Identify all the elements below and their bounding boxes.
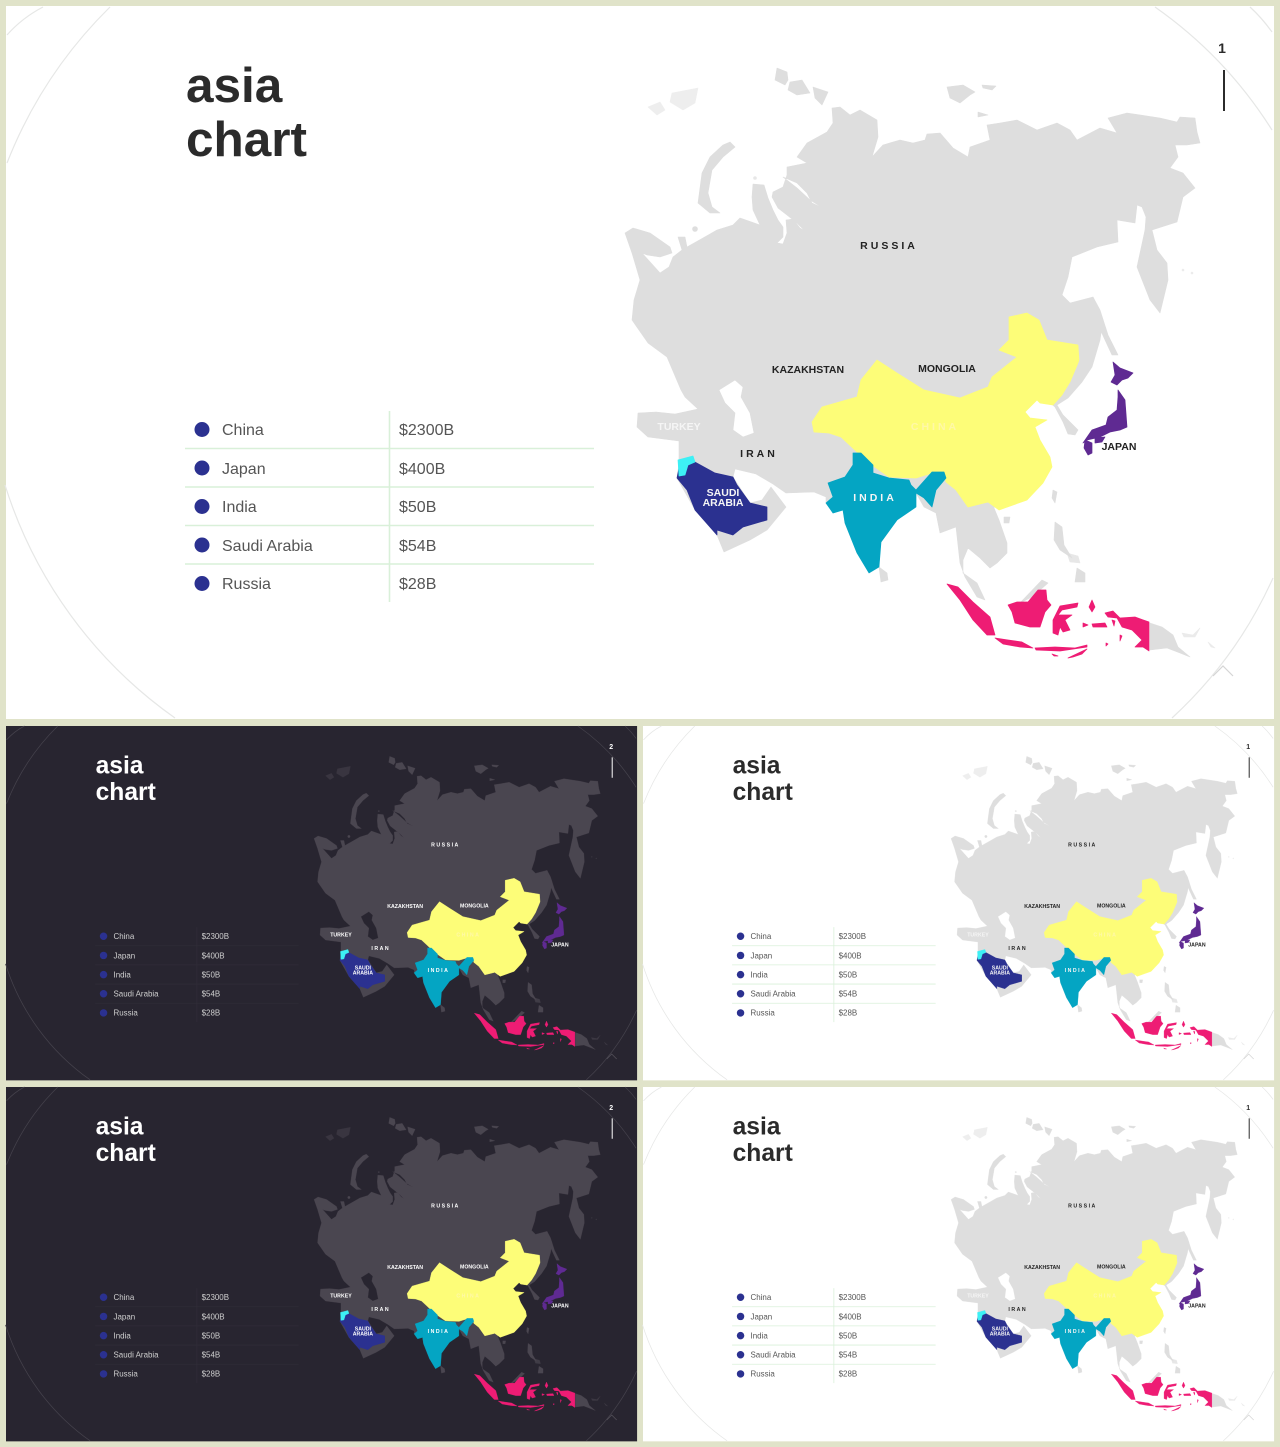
country labels: CHINA (911, 421, 959, 433)
country labels: KAZAKHSTAN (772, 364, 844, 376)
data table: $54B (839, 990, 857, 999)
data table: Saudi Arabia (751, 990, 796, 999)
country labels: SAUDI (355, 965, 372, 971)
data table: India (222, 499, 257, 516)
country labels: JAPAN (551, 1303, 569, 1309)
country labels: INDIA (428, 968, 449, 974)
country labels: ARABIA (353, 970, 373, 976)
country labels: SAUDI (992, 965, 1009, 971)
data table (95, 927, 299, 1022)
data table: China (222, 422, 264, 439)
data table: Russia (114, 1370, 138, 1379)
country labels (330, 842, 569, 976)
data table: $2300B (839, 932, 866, 941)
data table: $400B (202, 951, 225, 960)
data table: $2300B (399, 422, 454, 439)
country labels: SAUDI (707, 487, 739, 499)
data table: $54B (399, 538, 436, 555)
country labels: ARABIA (990, 1331, 1010, 1337)
country labels: IRAN (1008, 946, 1027, 952)
country labels: TURKEY (967, 933, 989, 939)
page bar (1223, 70, 1225, 111)
country labels: TURKEY (330, 1294, 352, 1300)
page number: 1 (1218, 40, 1226, 56)
data table: $400B (399, 461, 445, 478)
data table: Japan (751, 1312, 772, 1321)
country labels: CHINA (456, 1294, 480, 1300)
country labels: RUSSIA (431, 842, 460, 848)
country labels: MONGOLIA (1097, 904, 1126, 910)
country labels: SAUDI (355, 1326, 372, 1332)
data table: $50B (202, 1331, 220, 1340)
title: asia (733, 1113, 781, 1140)
scroll chevron (607, 1415, 617, 1420)
page bar (611, 1118, 614, 1139)
country labels: JAPAN (1102, 441, 1136, 453)
data table: $54B (202, 990, 220, 999)
map of asia (951, 1117, 1245, 1411)
data table: $54B (839, 1351, 857, 1360)
panel: large light slide (5, 6, 1274, 719)
country labels: SAUDI (992, 1326, 1009, 1332)
country labels: IRAN (371, 946, 390, 952)
country labels: MONGOLIA (1097, 1265, 1126, 1271)
country labels (657, 240, 1136, 509)
data table: Saudi Arabia (114, 1351, 159, 1360)
data table (95, 1288, 299, 1383)
data table: $400B (839, 1312, 862, 1321)
country labels: CHINA (456, 933, 480, 939)
country labels (967, 842, 1206, 976)
page bar (1248, 757, 1251, 778)
country labels: CHINA (1093, 1294, 1117, 1300)
data table: $50B (202, 970, 220, 979)
data table: Russia (751, 1009, 775, 1018)
data table: $28B (202, 1009, 220, 1018)
data table: $400B (202, 1312, 225, 1321)
title: chart (733, 1140, 793, 1167)
country labels: ARABIA (990, 970, 1010, 976)
data table: Russia (222, 576, 271, 593)
country labels: JAPAN (1188, 1303, 1206, 1309)
title: chart (96, 1140, 156, 1167)
data table: $28B (202, 1370, 220, 1379)
data table (732, 1288, 936, 1383)
data table: $50B (839, 970, 857, 979)
map of asia (314, 1117, 608, 1411)
country labels: CHINA (1093, 933, 1117, 939)
data table (185, 411, 594, 602)
data table: Russia (751, 1370, 775, 1379)
country labels: RUSSIA (860, 240, 918, 252)
country labels: MONGOLIA (918, 363, 976, 375)
data table: Saudi Arabia (751, 1351, 796, 1360)
country labels: IRAN (371, 1307, 390, 1313)
map of asia (625, 68, 1215, 658)
scroll chevron (1244, 1415, 1254, 1420)
data table: $28B (839, 1370, 857, 1379)
data table: $50B (399, 499, 436, 516)
title: asia (186, 58, 282, 113)
title: chart (96, 779, 156, 806)
data table: China (751, 1293, 772, 1302)
country labels: KAZAKHSTAN (1024, 904, 1060, 910)
data table: China (114, 932, 135, 941)
country labels: INDIA (853, 492, 897, 504)
data table: Russia (114, 1009, 138, 1018)
country labels: MONGOLIA (460, 1265, 489, 1271)
country labels: JAPAN (1188, 942, 1206, 948)
country labels (967, 1203, 1206, 1337)
country labels: TURKEY (330, 933, 352, 939)
title: chart (186, 112, 307, 167)
data table: India (114, 1331, 131, 1340)
country labels: ARABIA (703, 497, 744, 509)
data table: $28B (839, 1009, 857, 1018)
map of asia (951, 756, 1245, 1050)
data table: $2300B (839, 1293, 866, 1302)
page number: 1 (1246, 744, 1250, 751)
panel: light slide top (643, 726, 1274, 1080)
country labels: TURKEY (657, 421, 701, 433)
map of asia (314, 756, 608, 1050)
data table (732, 927, 936, 1022)
data table: Japan (751, 951, 772, 960)
country labels: KAZAKHSTAN (387, 904, 423, 910)
data table: Japan (222, 461, 266, 478)
country labels: MONGOLIA (460, 904, 489, 910)
country labels: INDIA (428, 1329, 449, 1335)
panel: dark slide bottom (6, 1087, 637, 1441)
country labels: INDIA (1065, 968, 1086, 974)
country labels: JAPAN (551, 942, 569, 948)
page bar (1248, 1118, 1251, 1139)
data table: $400B (839, 951, 862, 960)
title: asia (733, 752, 781, 779)
data table: India (114, 970, 131, 979)
country labels: KAZAKHSTAN (1024, 1265, 1060, 1271)
country labels: RUSSIA (1068, 1203, 1097, 1209)
data table: Japan (114, 1312, 135, 1321)
data table: Japan (114, 951, 135, 960)
data table: China (751, 932, 772, 941)
page number: 1 (1246, 1105, 1250, 1112)
country labels: KAZAKHSTAN (387, 1265, 423, 1271)
page number: 2 (609, 744, 613, 751)
data table: $50B (839, 1331, 857, 1340)
data table: India (751, 970, 768, 979)
data table: Saudi Arabia (114, 990, 159, 999)
data table: Saudi Arabia (222, 538, 313, 555)
country labels (330, 1203, 569, 1337)
country labels: INDIA (1065, 1329, 1086, 1335)
scroll chevron (1244, 1054, 1254, 1059)
data table: India (751, 1331, 768, 1340)
country labels: TURKEY (967, 1294, 989, 1300)
data table: China (114, 1293, 135, 1302)
page number: 2 (609, 1105, 613, 1112)
page bar (611, 757, 614, 778)
scroll chevron (607, 1054, 617, 1059)
data table: $2300B (202, 932, 229, 941)
panel: light slide bottom (643, 1087, 1274, 1441)
title: asia (96, 752, 144, 779)
country labels: ARABIA (353, 1331, 373, 1337)
scroll chevron (1213, 666, 1233, 676)
country labels: RUSSIA (1068, 842, 1097, 848)
title: asia (96, 1113, 144, 1140)
title: chart (733, 779, 793, 806)
country labels: IRAN (740, 448, 778, 460)
panel: dark slide top (6, 726, 637, 1080)
country labels: RUSSIA (431, 1203, 460, 1209)
data table: $2300B (202, 1293, 229, 1302)
data table: $54B (202, 1351, 220, 1360)
country labels: IRAN (1008, 1307, 1027, 1313)
data table: $28B (399, 576, 436, 593)
